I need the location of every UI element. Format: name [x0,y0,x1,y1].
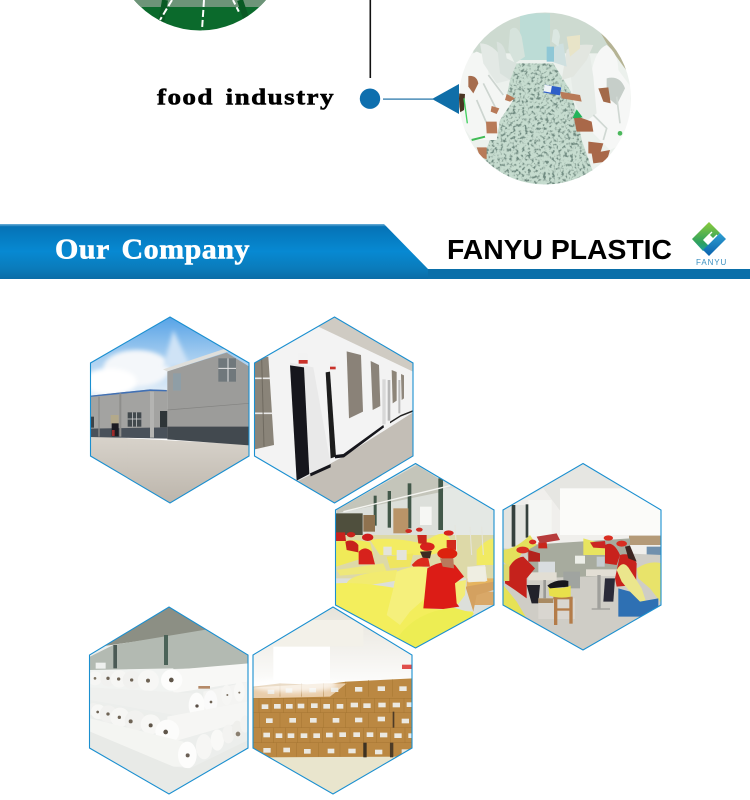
hexagon photo: warehouse cartons [250,605,415,800]
connector line to photo [383,98,433,100]
photo circle: previous industry (cropped) [134,0,266,30]
left workers [474,52,514,140]
hexagon photo: white non-woven rolls [87,605,252,800]
top rolls [172,663,248,693]
workers [505,557,535,598]
yellow fabric on chair [616,564,646,602]
hexagon frame [336,464,494,648]
photo circle: food industry workers [453,10,633,187]
hexagon photo: corridor [252,313,417,507]
vertical connector line [370,0,371,78]
timeline dot [360,88,380,109]
header banner: Our Company [0,222,750,279]
bottom rolls [156,735,176,744]
hexagon frame [253,607,412,794]
middle rolls [174,692,175,693]
workers [359,548,375,564]
hexagon photo: factory exterior [83,313,253,510]
heading: Our Company [55,234,250,266]
hexagon frame [503,464,661,650]
hexagon frame [254,317,413,503]
boxes and stool [538,598,575,619]
right workers [585,45,631,150]
brand logo [692,222,727,267]
foreground yellow [336,583,474,638]
packets on the belt [483,63,598,187]
banner bottom strip [0,269,750,279]
pointer triangle [432,84,459,114]
label: food industry: food industry [157,84,335,110]
brand name: FANYU PLASTIC [447,234,672,265]
lower rolls [90,702,160,732]
hexagon frame [90,317,249,503]
hexagon frame [90,607,248,794]
blue stool [618,588,658,617]
hexagon photo: sewing floor with yellow fabric [333,462,497,652]
hexagon photo: sewing workshop [500,462,667,655]
brand logo: FANYU [696,258,727,267]
carton wall [253,678,413,757]
floor [186,768,188,769]
banner blue tab [0,224,428,279]
